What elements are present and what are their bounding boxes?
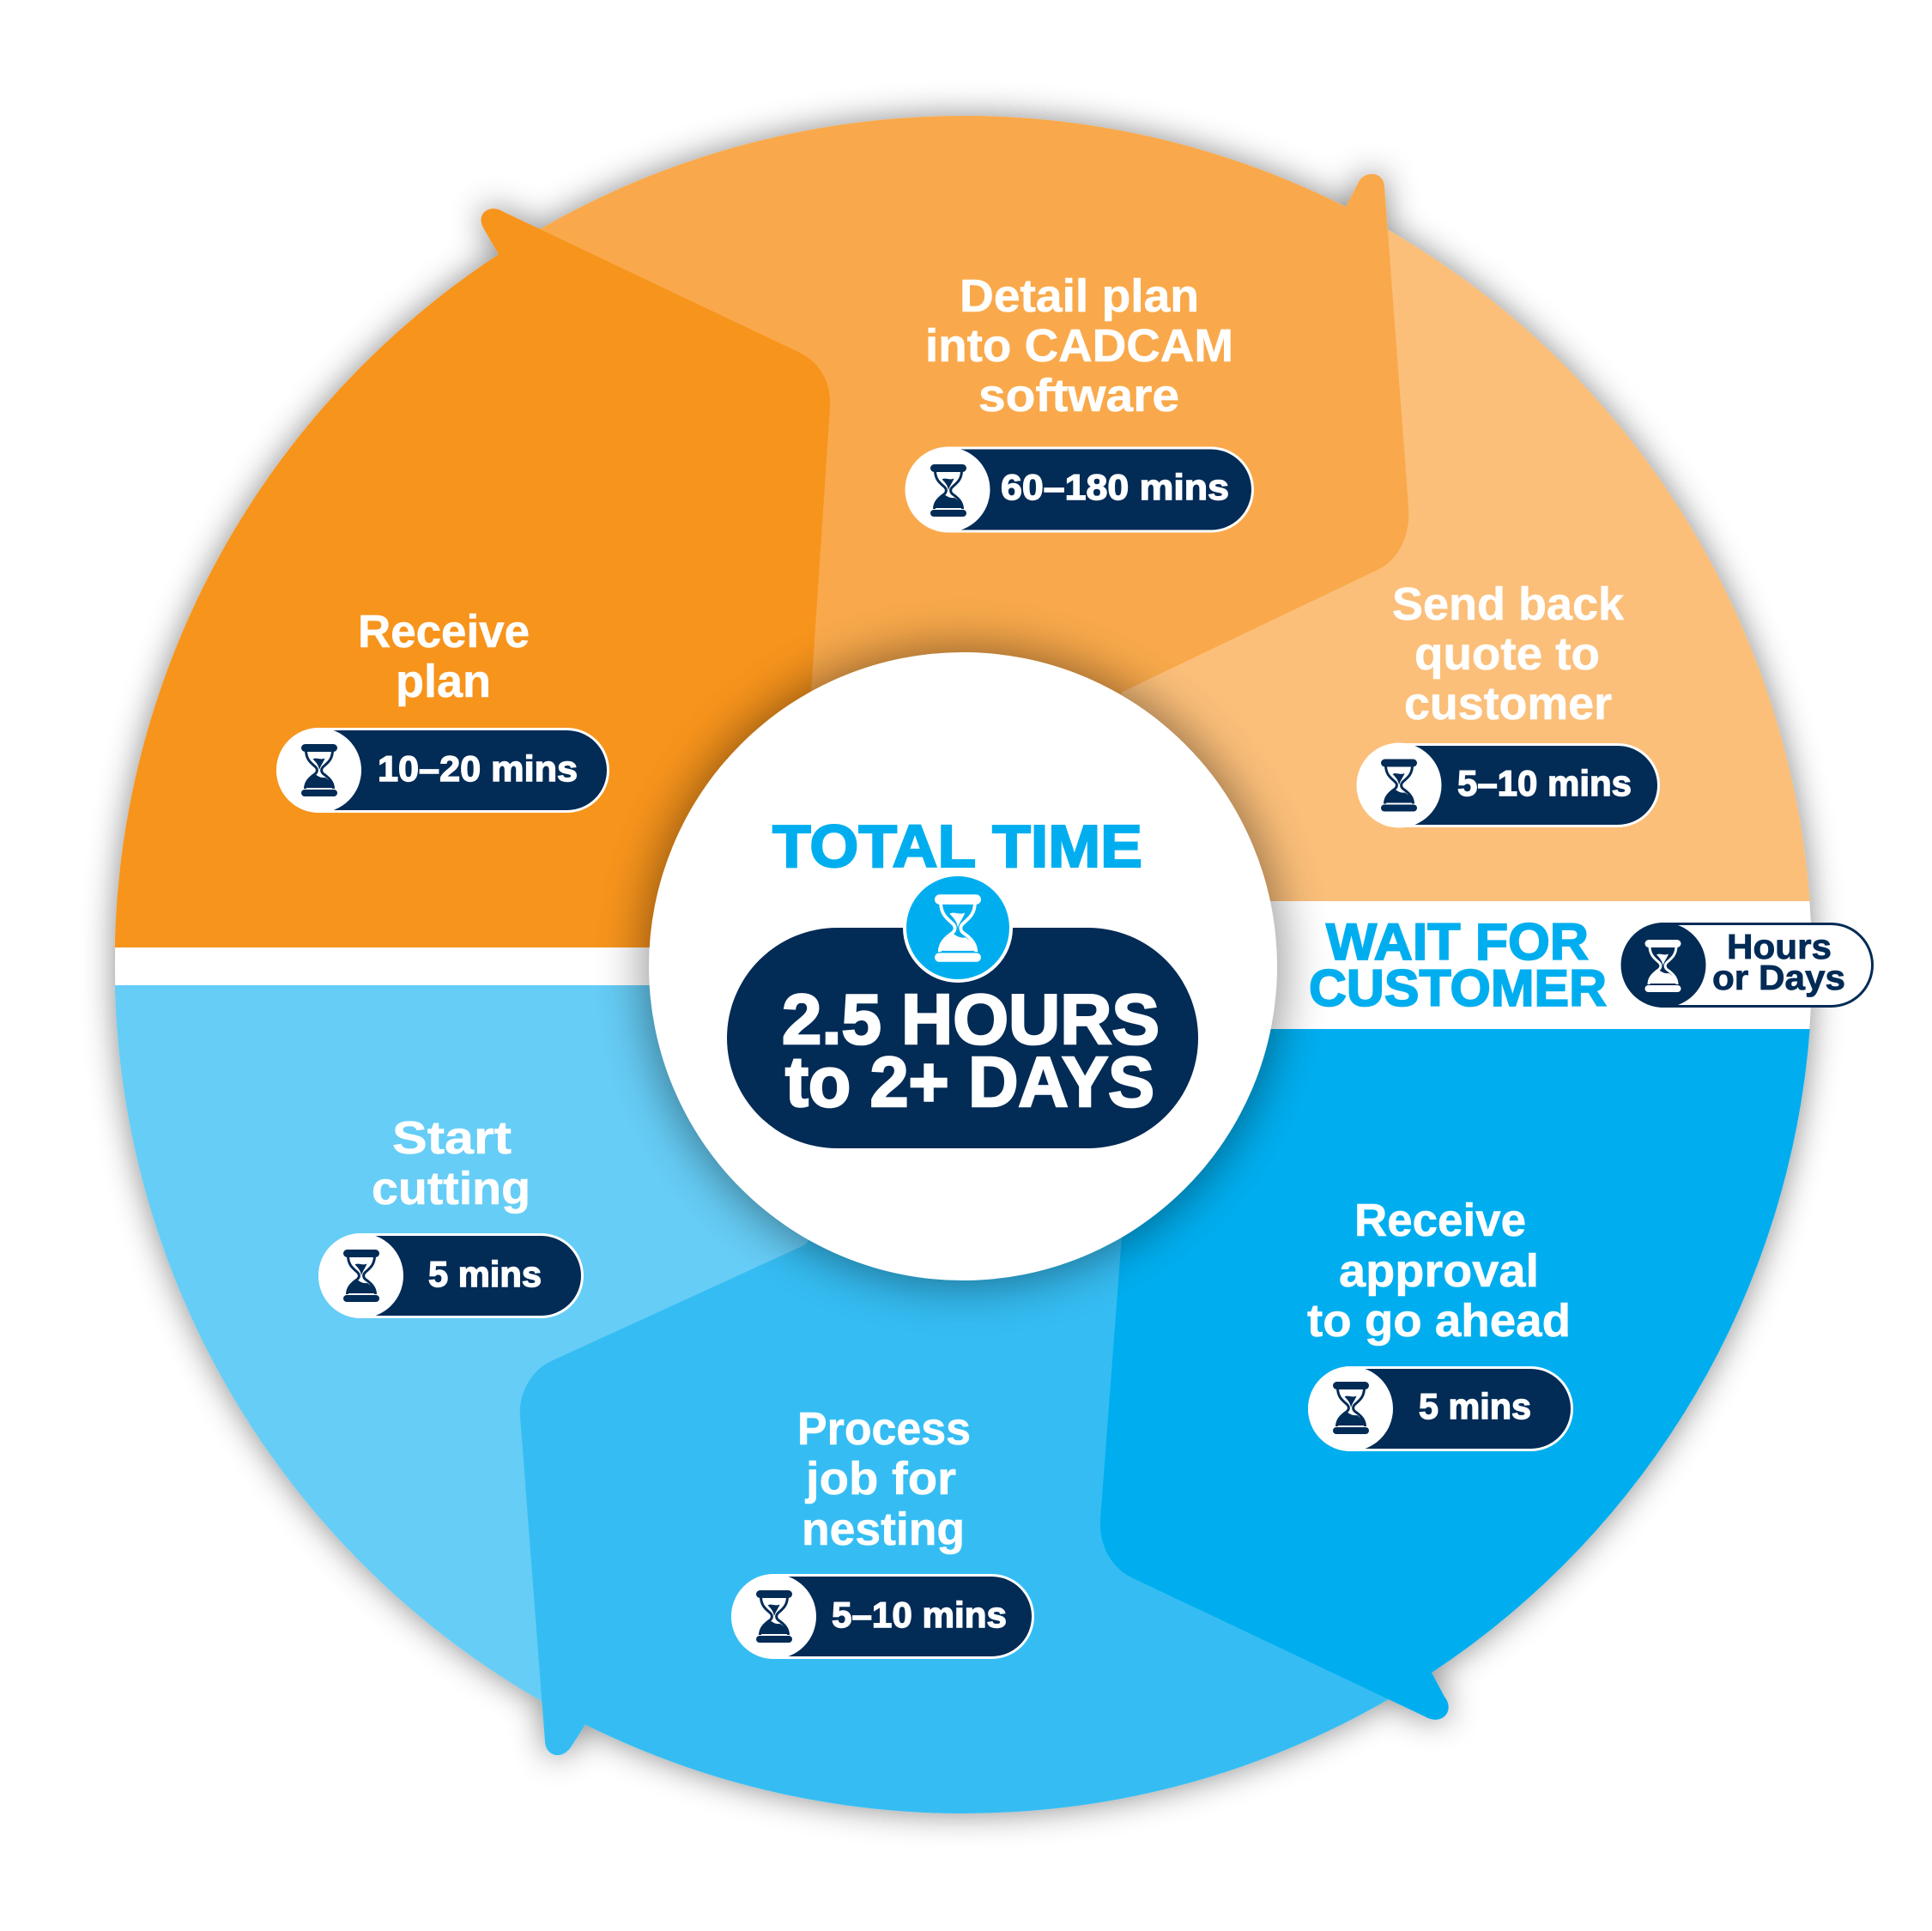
pill: hours or days: Hours [1727, 927, 1832, 966]
time pill: 10-20 mins: 10–20 mins [378, 748, 578, 789]
step label: receive approval: approval [1339, 1245, 1539, 1297]
step label: process job for nesting: Process [797, 1403, 971, 1455]
process cycle wheel [115, 116, 1812, 1813]
arrow segment: receive plan [115, 209, 830, 947]
time pill: 60-180 mins [905, 447, 1253, 532]
wait heading line 1: WAIT FOR [1326, 913, 1589, 971]
time pill: 5 mins: 5 mins [1419, 1386, 1531, 1426]
panel: send back quote [1356, 578, 1658, 827]
panel: start cutting [318, 1112, 582, 1318]
time pill: 5-10 mins: 5–10 mins [1457, 763, 1632, 803]
step label: receive approval [1307, 1195, 1571, 1347]
step label: receive approval: Receive [1354, 1195, 1526, 1246]
time pill: 5-10 mins [731, 1574, 1033, 1659]
step label: detail plan: Detail plan [960, 270, 1199, 322]
navy total pill [727, 928, 1198, 1148]
heading: total time: TOTAL TIME [772, 813, 1142, 880]
time pill: 5-10 mins: 5–10 mins [832, 1595, 1007, 1635]
time pill: 5-10 mins [1356, 743, 1658, 827]
step label: process job for nesting: job for [805, 1453, 956, 1504]
white wheel base with gaps [115, 117, 1812, 1813]
step label: start cutting: cutting [372, 1163, 530, 1214]
total time value line 1: 2.5 HOURS [782, 979, 1160, 1059]
arrow segment: process job [520, 968, 1425, 1813]
step label: receive approval: to go ahead [1307, 1295, 1571, 1347]
center circle shadow [645, 649, 1281, 1284]
pill: hours or days: or Days [1712, 958, 1845, 997]
time pill: 5 mins [318, 1233, 582, 1318]
step label: send back quote: quote to [1414, 628, 1600, 680]
panel: detail plan [905, 270, 1253, 532]
panel: receive plan [276, 606, 608, 813]
step label: detail plan: into CADCAM [925, 320, 1233, 372]
segment: send back quote [963, 116, 1810, 901]
step label: send back quote: Send back [1392, 578, 1625, 630]
time pill: 5 mins: 5 mins [428, 1254, 542, 1294]
panel: wait for customer [1309, 913, 1873, 1017]
wait heading line 2: CUSTOMER [1309, 959, 1607, 1017]
segment: start cutting [115, 985, 944, 1732]
time pill: 10-20 mins [276, 728, 608, 813]
step label: process job for nesting: nesting [802, 1504, 965, 1555]
step label: detail plan: software [978, 370, 1179, 421]
step label: start cutting: Start [392, 1112, 512, 1164]
panel: process job [731, 1403, 1033, 1659]
panel: receive approval [1307, 1195, 1572, 1451]
arrow segment: detail plan [515, 116, 1408, 968]
icon: hourglass badge [903, 873, 1013, 983]
arrow segment: receive approval [1100, 1029, 1810, 1720]
step label: process job for nesting [797, 1403, 971, 1555]
time pill: 60-180 mins: 60–180 mins [1001, 467, 1229, 507]
panel: total time [727, 813, 1198, 1148]
step label: receive plan: Receive [358, 606, 530, 657]
step label: start cutting [372, 1112, 530, 1214]
step label: send back quote: customer [1404, 678, 1612, 729]
step label: send back quote [1392, 578, 1625, 729]
step label: receive plan: plan [396, 656, 491, 707]
step label: detail plan [925, 270, 1233, 421]
pill: hours or days [1620, 923, 1873, 1008]
step label: receive plan [358, 606, 530, 707]
time pill: 5 mins [1308, 1366, 1572, 1451]
total time value line 2: to 2+ DAYS [785, 1042, 1154, 1122]
center white circle [649, 652, 1277, 1280]
